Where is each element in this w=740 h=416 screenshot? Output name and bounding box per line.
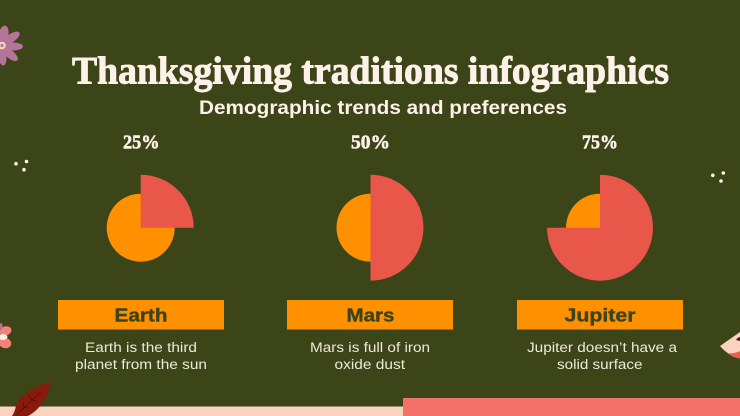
description: Earth: Earth is the third (85, 340, 197, 356)
pie chart: 25% (107, 175, 194, 262)
label bar: Earth: Earth (114, 304, 168, 326)
icon: dots left (14, 160, 28, 172)
description: Earth (75, 340, 207, 373)
description: Jupiter: Jupiter doesn’t have a (527, 340, 677, 356)
percentage: 75%: 75% (582, 132, 618, 154)
bottom band: coral (403, 398, 740, 416)
icon: salmon flower (0, 323, 13, 350)
column: Jupiter (517, 132, 683, 373)
label bar: Jupiter (517, 300, 683, 330)
percentage: 50%: 50% (351, 132, 390, 154)
label bar: Mars: Mars (346, 304, 394, 326)
percentage: 25%: 25% (123, 132, 160, 154)
description: Jupiter (527, 340, 677, 373)
pie chart: 50% (336, 175, 423, 281)
column: Earth (58, 132, 224, 373)
label bar: Earth (58, 300, 224, 330)
bottom band: peach (0, 406, 404, 416)
column: Mars (287, 132, 453, 373)
title: Thanksgiving traditions infographics (72, 50, 669, 92)
icon: right edge leaf (720, 332, 740, 358)
description: Mars: Mars is full of iron (310, 340, 430, 356)
description: Mars (310, 340, 430, 373)
label bar: Mars (287, 300, 453, 330)
icon: red leaf (12, 382, 51, 416)
description: Jupiter: solid surface (557, 357, 643, 373)
label bar: Jupiter: Jupiter (564, 304, 636, 326)
pie chart: 75% (547, 175, 653, 281)
icon: pink flower (0, 25, 23, 66)
icon: dots right (711, 171, 725, 183)
subtitle: Demographic trends and preferences (199, 97, 567, 119)
description: Mars: oxide dust (334, 357, 405, 373)
description: Earth: planet from the sun (75, 357, 207, 373)
